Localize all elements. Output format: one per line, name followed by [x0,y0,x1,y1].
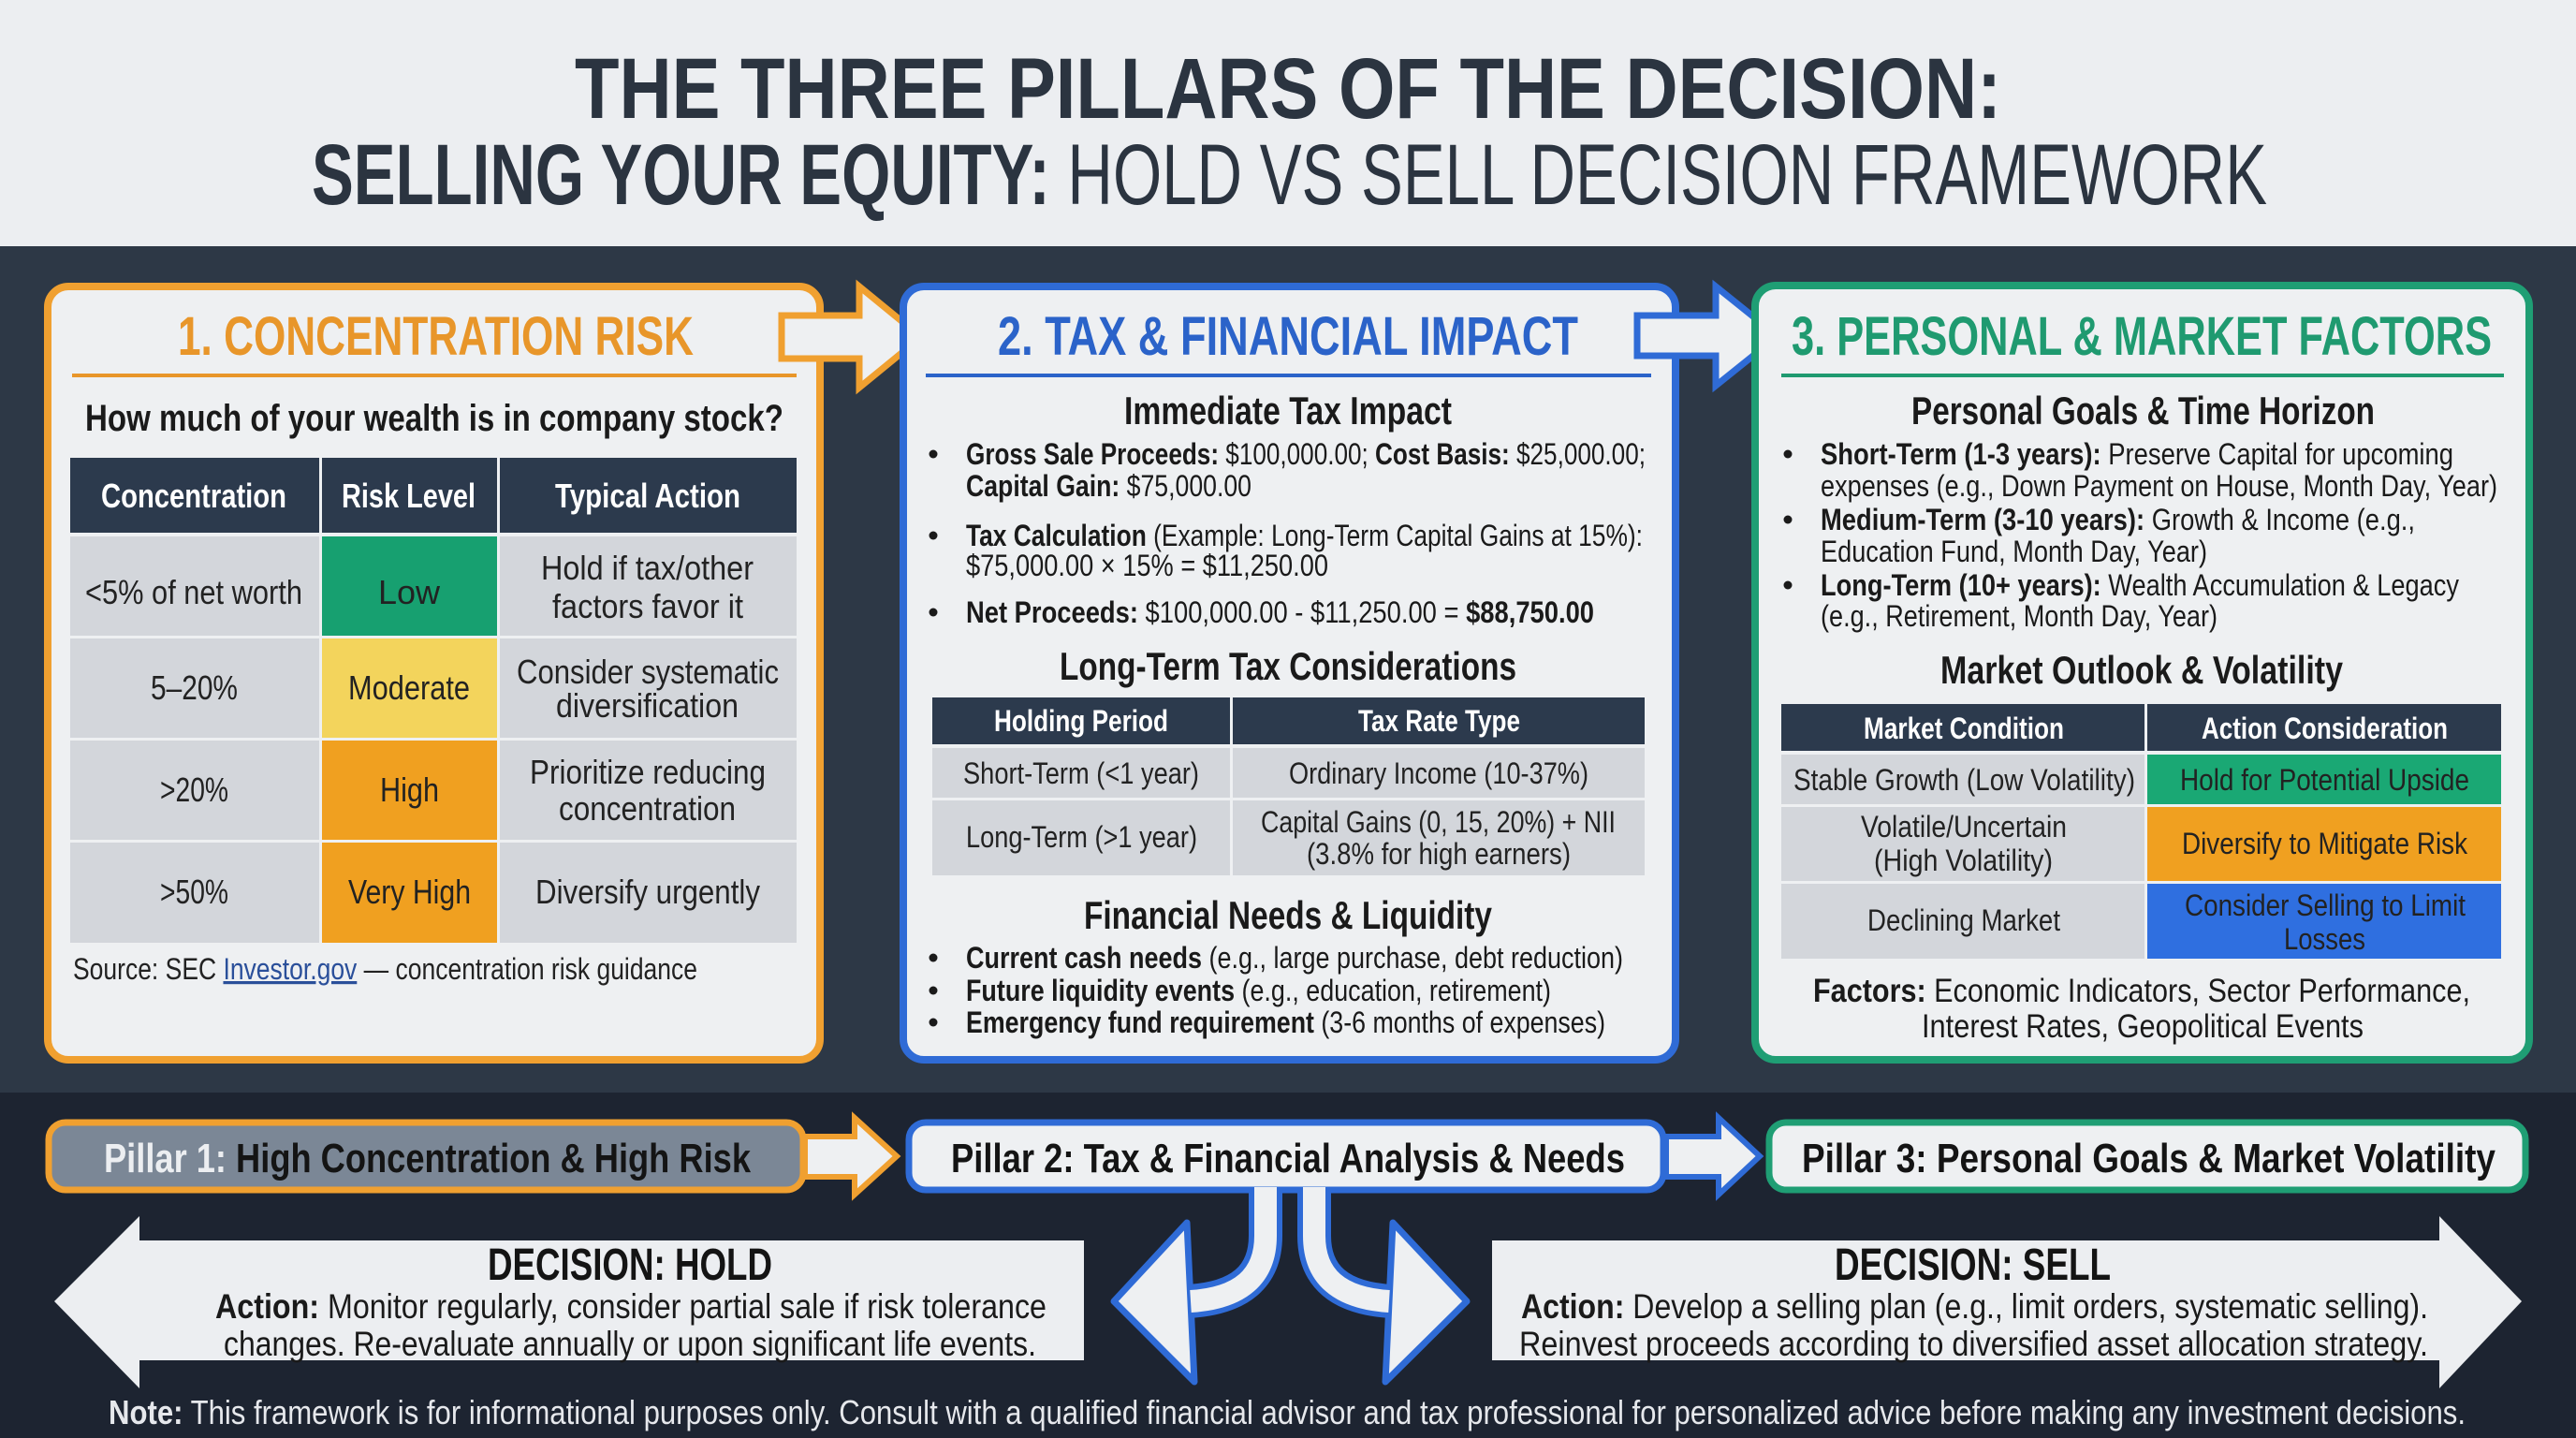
heading: concentration risk: 1. CONCENTRATION RISK [178,306,694,367]
section: immediate tax impact: Gross Sale Proceeds: $100,000.00; Cost Basis: $25,000.00; [966,437,1646,471]
section: personal goals: Medium-Term (3-10 years): Growth & Income (e.g., [1821,503,2415,536]
table: concentration levels: Concentration [101,477,286,515]
section: market outlook table: Volatile/Uncertain [1861,810,2067,844]
section: market outlook table: Action Consideration [2202,712,2448,745]
pillar 1 summary box: Pillar 1: High Concentration & High Risk [104,1136,751,1181]
section: market outlook table: (High Volatility) [1874,844,2053,877]
decision: hold arrow: Action: Monitor regularly, consider partial sale if risk tolerance [215,1287,1046,1326]
decision: sell arrow [1492,1216,2522,1388]
decision: sell arrow: DECISION: SELL [1835,1240,2111,1290]
table: concentration levels: factors favor it [552,587,743,625]
source note: Source: SEC Investor.gov — concentration risk guidance [73,952,697,986]
section: market outlook table: Market Condition [1864,712,2064,745]
pillar 2 summary box [909,1123,1663,1190]
factors text: Factors: Economic Indicators, Sector Performance, [1813,973,2470,1009]
section: personal goals: Personal Goals & Time Horizon [1911,389,2375,433]
table: concentration levels: Consider systematic [517,653,779,691]
pillar 1 summary box [49,1123,803,1190]
section: immediate tax impact: Immediate Tax Impact [1124,389,1452,433]
section: personal goals [1784,389,2497,633]
section: long-term tax table [932,644,1645,875]
table: concentration levels [70,458,797,943]
section: market outlook table: Diversify to Mitigate Risk [2182,827,2468,860]
factors text: Interest Rates, Geopolitical Events [1922,1008,2364,1045]
table: concentration levels: Low [378,573,441,611]
section: long-term tax table: Long-Term Tax Considerations [1060,644,1516,688]
table: concentration levels: Risk Level [342,477,476,515]
table: concentration levels: <5% of net worth [85,573,302,611]
section: personal goals: Long-Term (10+ years): Wealth Accumulation & Legacy [1821,568,2459,602]
section: financial needs: Emergency fund requirement (3-6 months of expenses) [966,1005,1605,1039]
section: immediate tax impact: Capital Gain: $75,000.00 [966,469,1251,503]
section: personal goals: Short-Term (1-3 years): Preserve Capital for upcoming [1821,437,2453,471]
panel: personal & market factors [1755,286,2529,1060]
section: personal goals: (e.g., Retirement, Month Day, Year) [1821,599,2217,633]
table: concentration levels: Typical Action [555,477,740,515]
split arrows: hold / sell [1114,1187,1467,1382]
section: long-term tax table: Tax Rate Type [1358,704,1520,738]
table: concentration levels: >50% [160,873,228,911]
section: long-term tax table: Capital Gains (0, 15, 20%) + NII [1261,805,1616,839]
table: concentration levels: Hold if tax/other [541,549,754,587]
title [312,41,2267,223]
title: THE THREE PILLARS OF THE DECISION: [575,41,2001,137]
panel: tax & financial impact [903,286,1676,1060]
section: market outlook table [1781,648,2501,959]
section: market outlook table: Declining Market [1867,903,2060,937]
section: financial needs: Future liquidity events (e.g., education, retirement) [966,974,1551,1007]
section: long-term tax table: Holding Period [994,704,1168,738]
section: financial needs [929,893,1623,1039]
section: long-term tax table: Long-Term (>1 year) [966,820,1197,854]
section: long-term tax table: Ordinary Income (10-37%) [1289,756,1588,790]
section: immediate tax impact: $75,000.00 × 15% = $11,250.00 [966,549,1328,582]
arrow: pillar 1 to 2 [805,1118,897,1195]
table: concentration levels: Very High [348,873,471,911]
pillar 3 summary box [1769,1123,2525,1190]
table: concentration levels: High [380,770,439,809]
factors text [1813,973,2470,1045]
decision: sell arrow: Reinvest proceeds according to diversified asset allocation strategy. [1519,1325,2428,1363]
section: market outlook table: Stable Growth (Low Volatility) [1793,763,2135,797]
decision: hold arrow [54,1216,1084,1388]
table: concentration levels: Prioritize reducing [530,753,766,791]
section: financial needs: Financial Needs & Liquidity [1084,893,1493,937]
table: concentration levels: >20% [160,770,228,809]
table: concentration levels: 5–20% [151,668,238,707]
decision: hold arrow: DECISION: HOLD [488,1240,772,1290]
section: immediate tax impact [929,389,1646,629]
section: market outlook table: Market Outlook & Volatility [1940,648,2344,692]
pillar 2 summary box: Pillar 2: Tax & Financial Analysis & Needs [951,1136,1625,1181]
question text: How much of your wealth is in company stock? [85,398,783,439]
section: market outlook table: Hold for Potential Upside [2180,763,2469,797]
section: market outlook table: Consider Selling to Limit [2185,888,2466,922]
decision: sell arrow: Action: Develop a selling plan (e.g., limit orders, systematic selling). [1521,1287,2428,1326]
section: immediate tax impact: Tax Calculation (Example: Long-Term Capital Gains at 15%): [966,519,1643,552]
section: immediate tax impact: Net Proceeds: $100,000.00 - $11,250.00 = $88,750.00 [966,595,1594,629]
table: concentration levels: concentration [559,789,736,828]
section: market outlook table: Losses [2284,922,2365,956]
section: long-term tax table: (3.8% for high earners) [1307,837,1571,871]
table: concentration levels: Moderate [348,668,470,707]
panel: concentration risk [48,286,820,1060]
decision: hold arrow: changes. Re-evaluate annually or upon significant life events. [224,1325,1036,1363]
arrow: pillar 2 to 3 [1666,1118,1760,1195]
section: personal goals: Education Fund, Month Day, Year) [1821,535,2207,568]
arrow: panel 2 to 3 [1637,286,1778,386]
section: financial needs: Current cash needs (e.g., large purchase, debt reduction) [966,941,1623,975]
table: concentration levels: Diversify urgently [535,873,760,911]
arrow: panel 1 to 2 [782,286,921,388]
heading: tax & financial impact: 2. TAX & FINANCIAL IMPACT [998,306,1578,367]
section: long-term tax table: Short-Term (<1 year) [963,756,1199,790]
table: concentration levels: diversification [556,686,739,725]
